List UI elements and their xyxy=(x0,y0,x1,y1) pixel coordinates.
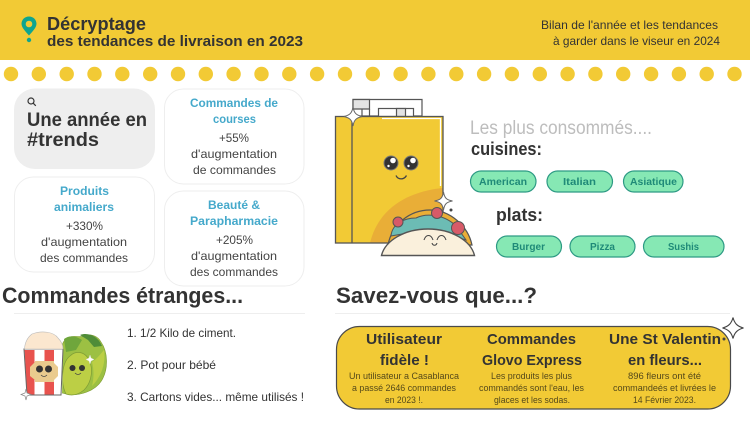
list: commandes étranges: 1. 1/2 Kilo de ciment. xyxy=(127,326,236,340)
icon: search xyxy=(28,98,36,106)
panel: commandes de courses xyxy=(164,89,304,184)
panel: commandes de courses: Commandes de xyxy=(190,96,278,110)
panel: beauté et parapharmacie: des commandes xyxy=(190,265,278,279)
text: les plus consommés: Les plus consommés.... xyxy=(470,118,652,139)
list: commandes étranges xyxy=(127,326,304,404)
column: commandes glovo express: Commandes xyxy=(487,331,576,348)
panel: produits animaliers: Produits xyxy=(60,184,109,198)
title: Décryptage xyxy=(47,14,146,34)
faces xyxy=(36,365,85,372)
taco face xyxy=(424,236,446,245)
heading: une année en trends xyxy=(27,110,147,151)
list: commandes étranges: 3. Cartons vides... même utilisés ! xyxy=(127,390,304,404)
pills: plats xyxy=(496,236,724,257)
title xyxy=(47,14,303,50)
heading: plats: plats: xyxy=(496,205,543,225)
heading: une année en trends: Une année en xyxy=(27,110,147,131)
dotted row xyxy=(4,67,742,81)
column: utilisateur fidèle: Un utilisateur a Casablanca xyxy=(349,371,459,381)
panel: produits animaliers: animaliers xyxy=(54,200,114,214)
panel: beauté et parapharmacie: d'augmentation xyxy=(191,249,277,263)
icon: location pin xyxy=(22,16,36,42)
pills: plats: Burger xyxy=(512,242,545,253)
column: commandes glovo express: glaces et les sodas. xyxy=(494,395,570,405)
column: une st valentin en fleurs: commandeés et livrées le xyxy=(613,383,716,393)
column: une st valentin en fleurs: 14 Février 2023. xyxy=(633,395,696,405)
subtitle: à garder dans le viseur en 2024 xyxy=(553,34,720,48)
panel: une année en trends xyxy=(14,88,155,169)
column: utilisateur fidèle xyxy=(349,331,459,405)
panel: beauté et parapharmacie: Beauté & xyxy=(208,198,260,212)
column: une st valentin en fleurs xyxy=(609,331,721,405)
column: une st valentin en fleurs: 896 fleurs ont été xyxy=(628,371,701,381)
panel: beauté et parapharmacie: Parapharmacie xyxy=(190,214,278,228)
eyes and smile xyxy=(384,156,418,179)
icon: sparkle xyxy=(434,192,452,210)
subtitle: Bilan de l'année et les tendances xyxy=(541,18,718,32)
panel: produits animaliers: d'augmentation xyxy=(41,235,127,249)
panel: commandes de courses: de commandes xyxy=(193,163,276,177)
pills: plats: Pizza xyxy=(590,242,615,253)
column: utilisateur fidèle: a passé 2646 commandes xyxy=(352,383,456,393)
panel: commandes de courses: +55% xyxy=(219,131,249,145)
panel: beauté et parapharmacie xyxy=(164,191,304,286)
pills: plats: Sushis xyxy=(668,242,699,253)
heading: commandes étranges: Commandes étranges... xyxy=(2,283,243,308)
panel: commandes de courses: d'augmentation xyxy=(191,147,277,161)
title: des tendances de livraison en 2023 xyxy=(47,33,303,50)
list: commandes étranges: 2. Pot pour bébé xyxy=(127,358,216,372)
heading: cuisines: cuisines: xyxy=(471,139,542,159)
column: une st valentin en fleurs: en fleurs... xyxy=(628,352,702,369)
subtitle xyxy=(541,18,720,48)
heading: savez-vous que: Savez-vous que...? xyxy=(336,283,537,308)
pills: cuisines: American xyxy=(479,177,527,188)
column: commandes glovo express xyxy=(479,331,584,405)
column: utilisateur fidèle: en 2023 !. xyxy=(385,395,423,405)
icon: sparkle xyxy=(344,107,362,126)
icon: taco with face xyxy=(382,192,474,256)
pills: cuisines xyxy=(470,171,683,192)
column: utilisateur fidèle: fidèle ! xyxy=(380,352,429,369)
column: utilisateur fidèle: Utilisateur xyxy=(366,331,442,348)
pills: cuisines: Italian xyxy=(563,177,596,188)
column: commandes glovo express: Glovo Express xyxy=(482,352,582,369)
column: une st valentin en fleurs: Une St Valentin xyxy=(609,331,721,348)
column: commandes glovo express: Les produits les plus xyxy=(491,371,572,381)
panel: beauté et parapharmacie: +205% xyxy=(216,233,253,247)
pills: cuisines: Asiatique xyxy=(630,177,677,188)
panel: produits animaliers xyxy=(14,177,154,272)
icon: sparkle xyxy=(722,318,744,338)
icon: shopping bag with face xyxy=(336,100,443,243)
header band xyxy=(0,0,750,60)
panel: produits animaliers: des commandes xyxy=(40,251,128,265)
icon: popcorn and lettuce xyxy=(21,332,107,400)
panel: savez-vous que xyxy=(336,318,744,409)
column: commandes glovo express: commandés sont l'eau, les xyxy=(479,383,584,393)
panel: produits animaliers: +330% xyxy=(66,219,103,233)
heading: une année en trends: #trends xyxy=(27,130,99,151)
panel: commandes de courses: courses xyxy=(213,112,256,126)
